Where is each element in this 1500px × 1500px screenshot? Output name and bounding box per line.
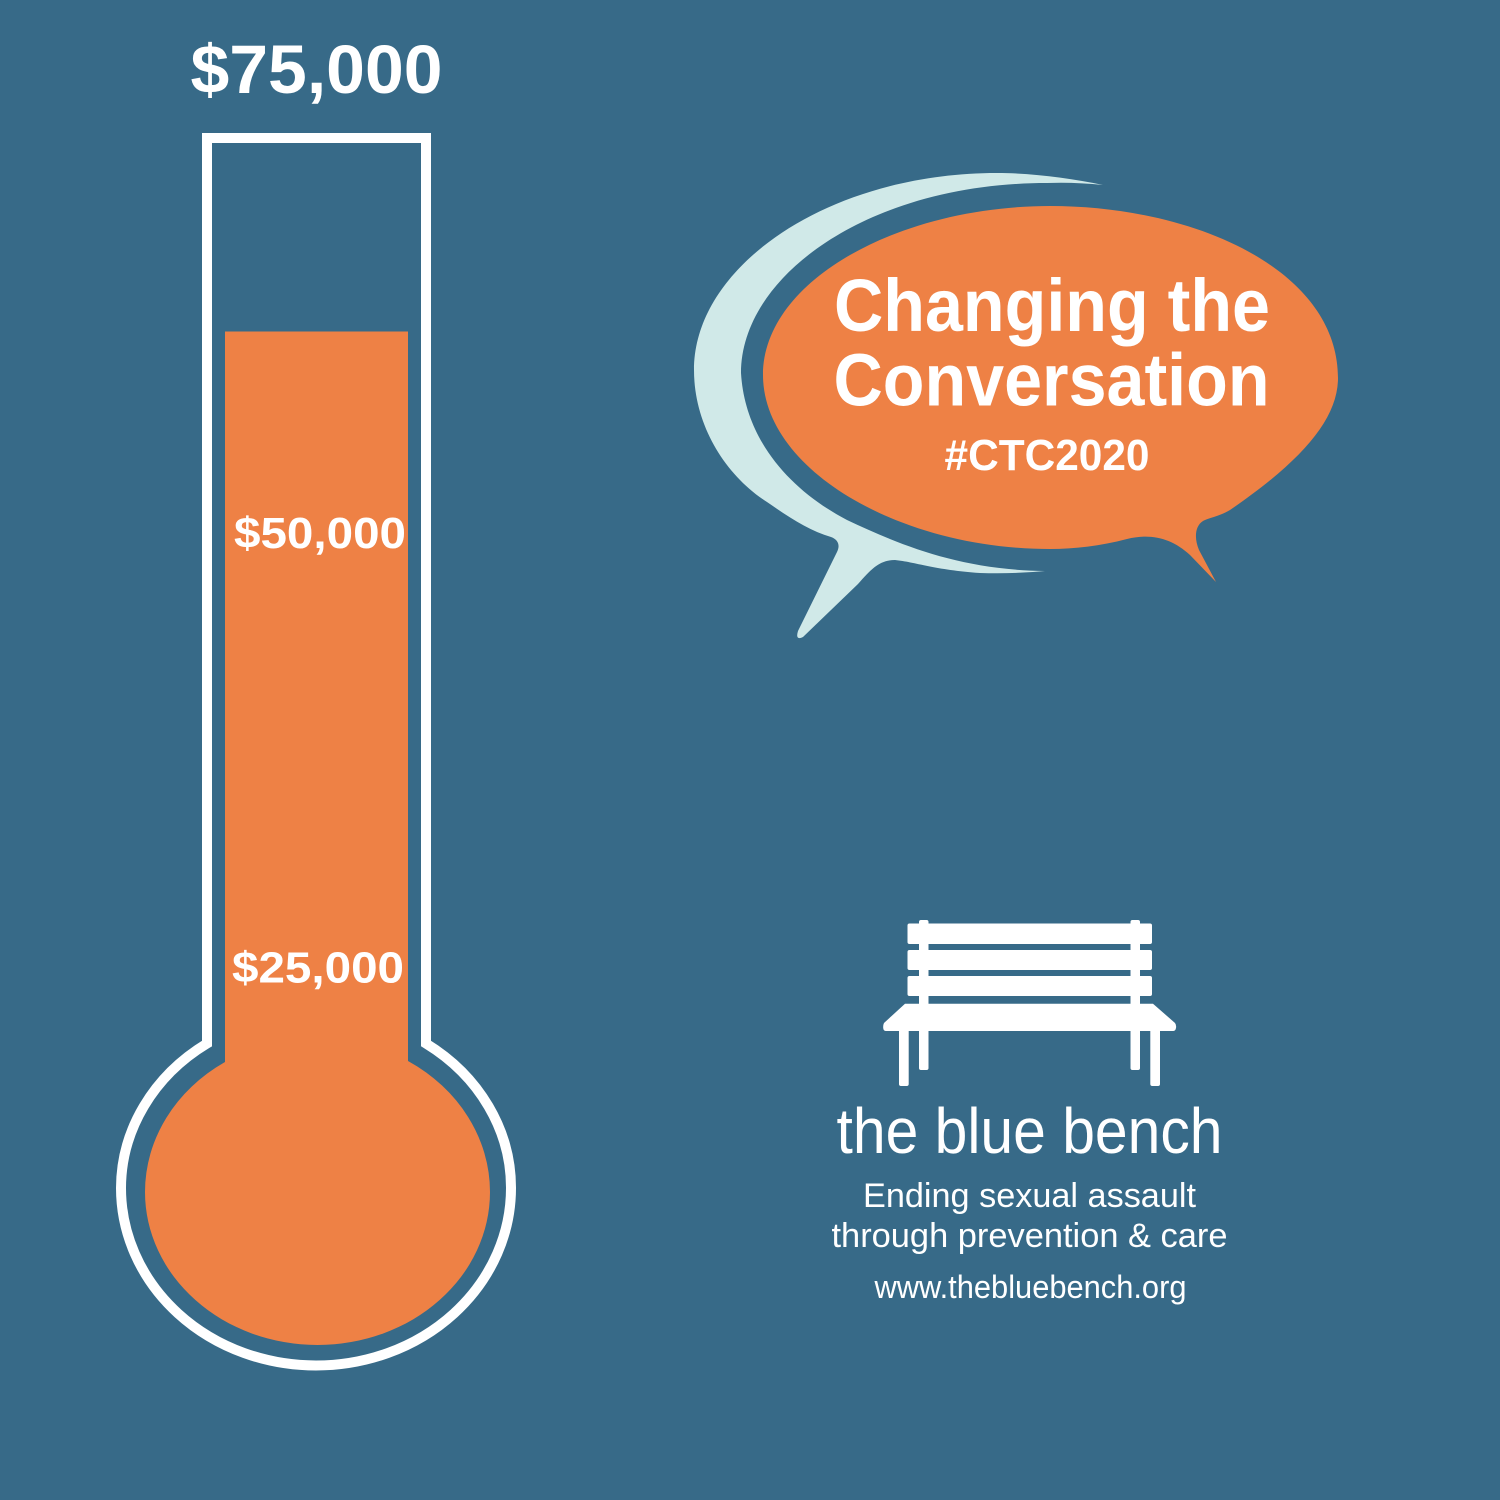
label: 50,000: $50,000: [234, 509, 406, 558]
goal amount: $75,000: [190, 31, 442, 108]
orange bubble shape: [763, 206, 1338, 582]
title: Conversation: [834, 338, 1270, 422]
thermometer: [121, 138, 511, 1365]
tagline: through prevention & care: [832, 1217, 1228, 1255]
title: Changing the: [834, 264, 1270, 347]
tagline: Ending sexual assault: [863, 1177, 1197, 1215]
hashtag: #CTC2020: [944, 431, 1150, 480]
logo name: the blue bench: [836, 1095, 1222, 1167]
thermometer outline: [121, 138, 511, 1365]
icon: bench: [883, 920, 1176, 1086]
title: [834, 264, 1270, 422]
thermometer fill: [145, 332, 490, 1345]
website: www.thebluebench.org: [874, 1269, 1186, 1305]
label: 25,000: $25,000: [232, 944, 404, 992]
tagline: [832, 1177, 1228, 1255]
speech bubble: light back: [694, 173, 1103, 638]
speech bubble: orange front: [763, 206, 1338, 582]
